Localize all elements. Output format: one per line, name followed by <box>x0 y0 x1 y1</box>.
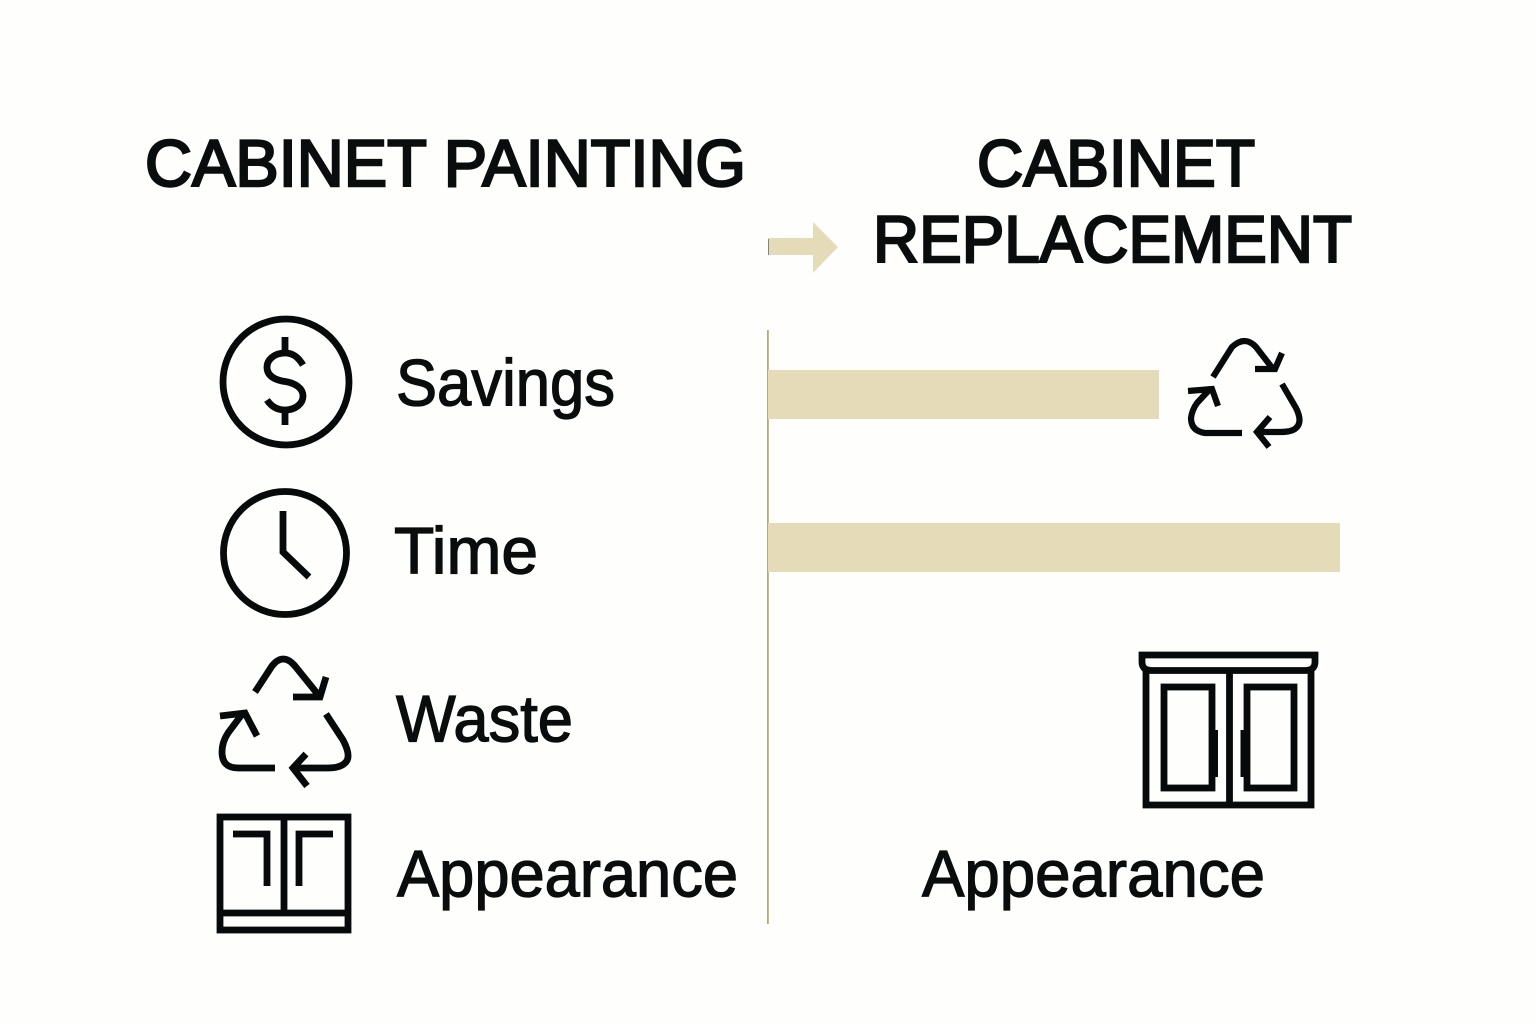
icon: recycle left <box>220 659 348 786</box>
center divider <box>767 330 769 924</box>
heading: cabinet replacement: CABINET <box>977 126 1255 200</box>
icon: cabinet left <box>220 817 348 930</box>
label: appearance right: Appearance <box>922 836 1265 910</box>
label: appearance left: Appearance <box>397 836 738 910</box>
label: waste: Waste <box>396 682 573 756</box>
heading: cabinet replacement <box>873 126 1352 276</box>
label: savings: Savings <box>396 346 615 420</box>
icon: cabinet right <box>1142 655 1315 805</box>
heading: cabinet painting: CABINET PAINTING <box>145 126 746 200</box>
label: time: Time <box>394 514 538 588</box>
bar: savings <box>768 370 1159 419</box>
arrow <box>768 222 838 273</box>
heading: cabinet replacement: REPLACEMENT <box>873 202 1352 276</box>
icon: clock <box>224 492 346 614</box>
bar: time <box>768 523 1340 572</box>
icon: recycle right <box>1188 341 1300 447</box>
icon: dollar coin <box>223 319 349 445</box>
